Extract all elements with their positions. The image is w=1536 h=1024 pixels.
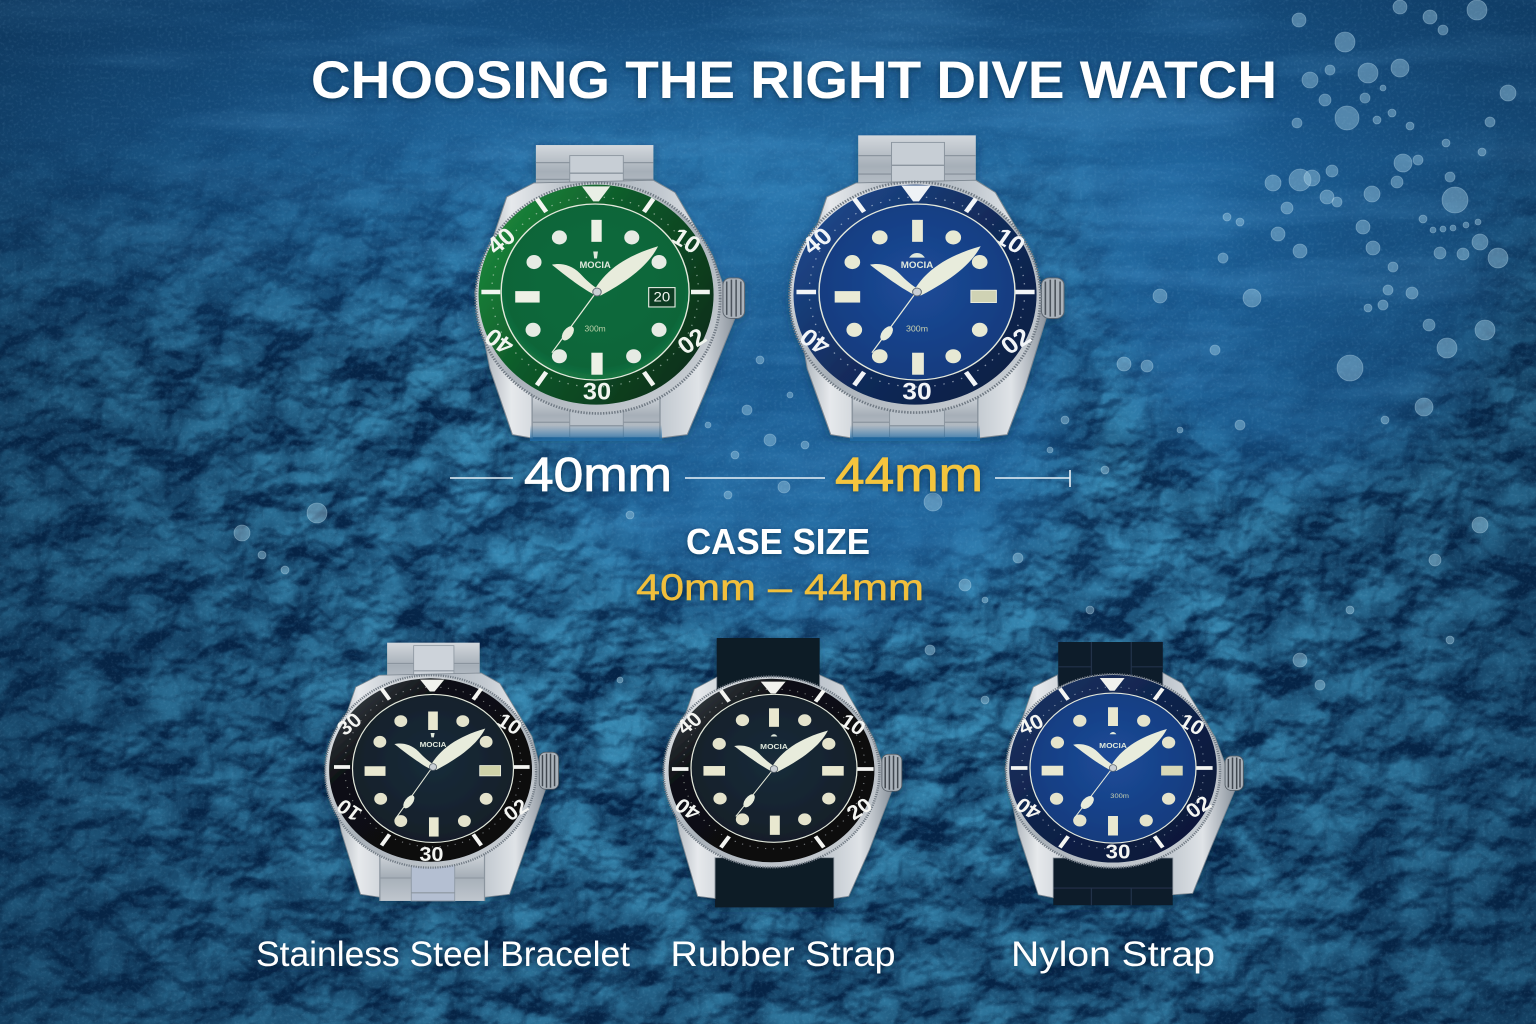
bezel: 30 bbox=[333, 709, 367, 740]
bezel: 40 bbox=[795, 323, 836, 359]
dial: 300m bbox=[585, 325, 606, 334]
lower bracelet bbox=[532, 393, 660, 437]
dial: 300m bbox=[1110, 792, 1129, 800]
watch: black dial rubber strap bbox=[664, 638, 902, 907]
bezel: 02 bbox=[673, 324, 712, 360]
dial: MOCIA bbox=[760, 742, 788, 751]
dial: MOCIA bbox=[901, 261, 934, 270]
hands bbox=[394, 729, 485, 818]
bezel: 10 bbox=[1175, 709, 1209, 740]
case size ruler lines bbox=[450, 470, 1070, 487]
strap label: stainless steel bracelet: Stainless Steel Bracelet bbox=[256, 935, 630, 974]
bezel: 02 bbox=[1181, 791, 1216, 823]
watch: navy dial nylon strap bbox=[1005, 642, 1243, 905]
bezel: 10 bbox=[667, 223, 705, 260]
bezel: 20 bbox=[843, 794, 877, 825]
dial: 20 bbox=[654, 290, 670, 306]
bezel: 30 bbox=[1106, 841, 1130, 863]
dial: MOCIA bbox=[1099, 741, 1127, 750]
bezel: 30 bbox=[419, 844, 443, 866]
bezel: 40 bbox=[797, 223, 838, 260]
bezel: 40 bbox=[672, 708, 707, 739]
steel bracelet bbox=[858, 135, 976, 197]
watch: green dial 40mm bbox=[475, 145, 745, 438]
steel ring bbox=[790, 182, 1040, 413]
hands bbox=[552, 246, 658, 353]
bezel: 10 bbox=[493, 709, 526, 740]
bezel bbox=[794, 185, 1037, 405]
strap reflection fade under top watches bbox=[530, 425, 980, 441]
steel ring bbox=[1006, 674, 1220, 868]
bezel: 02 bbox=[499, 795, 533, 826]
dial: MOCIA bbox=[579, 261, 611, 270]
dial: 300m bbox=[906, 324, 928, 333]
dial bbox=[691, 694, 857, 842]
dial bbox=[352, 694, 514, 842]
crown bbox=[882, 754, 902, 791]
hands bbox=[734, 731, 828, 816]
bubbles bbox=[234, 0, 1516, 704]
bezel: 10 bbox=[836, 710, 870, 740]
strap label: nylon strap: Nylon Strap bbox=[1011, 935, 1215, 974]
bezel: 40 bbox=[671, 793, 705, 824]
bezel: 02 bbox=[996, 323, 1037, 360]
bezel: 10 bbox=[990, 223, 1030, 259]
hands bbox=[1073, 729, 1167, 818]
steel ring bbox=[325, 675, 536, 868]
crown bbox=[1225, 756, 1243, 790]
steel ring bbox=[476, 183, 720, 413]
crown bbox=[1041, 278, 1064, 318]
case and lugs bbox=[794, 180, 1046, 438]
rubber strap bbox=[715, 638, 834, 907]
watch: black dial stainless bracelet bbox=[325, 643, 559, 901]
steel ring bbox=[664, 676, 879, 867]
bezel: 40 bbox=[480, 322, 519, 359]
case size ruler: 44mm label: 44mm bbox=[835, 449, 983, 502]
lower bracelet bbox=[852, 393, 978, 437]
bezel: 10 bbox=[333, 794, 366, 825]
bezel: 40 bbox=[1011, 793, 1046, 824]
crown bbox=[539, 752, 559, 789]
bezel bbox=[329, 678, 533, 866]
dial bbox=[501, 204, 689, 380]
title: CHOOSING THE RIGHT DIVE WATCH bbox=[311, 51, 1277, 110]
dial bbox=[1030, 693, 1196, 843]
crown bbox=[723, 278, 745, 318]
lower bracelet bbox=[380, 852, 485, 901]
dial bbox=[819, 204, 1015, 380]
watch: blue dial 44mm bbox=[790, 135, 1064, 438]
bezel: 40 bbox=[1014, 710, 1047, 740]
case size range: 40mm – 44mm bbox=[636, 567, 924, 608]
case size ruler: 40mm label: 40mm bbox=[524, 449, 672, 502]
dial: MOCIA bbox=[420, 740, 447, 749]
case and lugs bbox=[666, 675, 892, 898]
case and lugs bbox=[475, 180, 735, 438]
bezel bbox=[1009, 675, 1217, 863]
bezel: 30 bbox=[583, 379, 611, 405]
case size heading: CASE SIZE bbox=[686, 521, 870, 562]
bezel: 40 bbox=[482, 223, 521, 260]
case and lugs bbox=[328, 673, 546, 897]
strap label: rubber strap: Rubber Strap bbox=[670, 935, 896, 974]
bezel bbox=[479, 185, 714, 405]
steel bracelet bbox=[536, 145, 653, 200]
steel bracelet bbox=[387, 643, 480, 689]
bezel: 30 bbox=[902, 379, 932, 405]
hands bbox=[870, 246, 981, 353]
nylon strap bbox=[1053, 642, 1173, 905]
bezel bbox=[669, 679, 877, 862]
case and lugs bbox=[1005, 673, 1235, 898]
